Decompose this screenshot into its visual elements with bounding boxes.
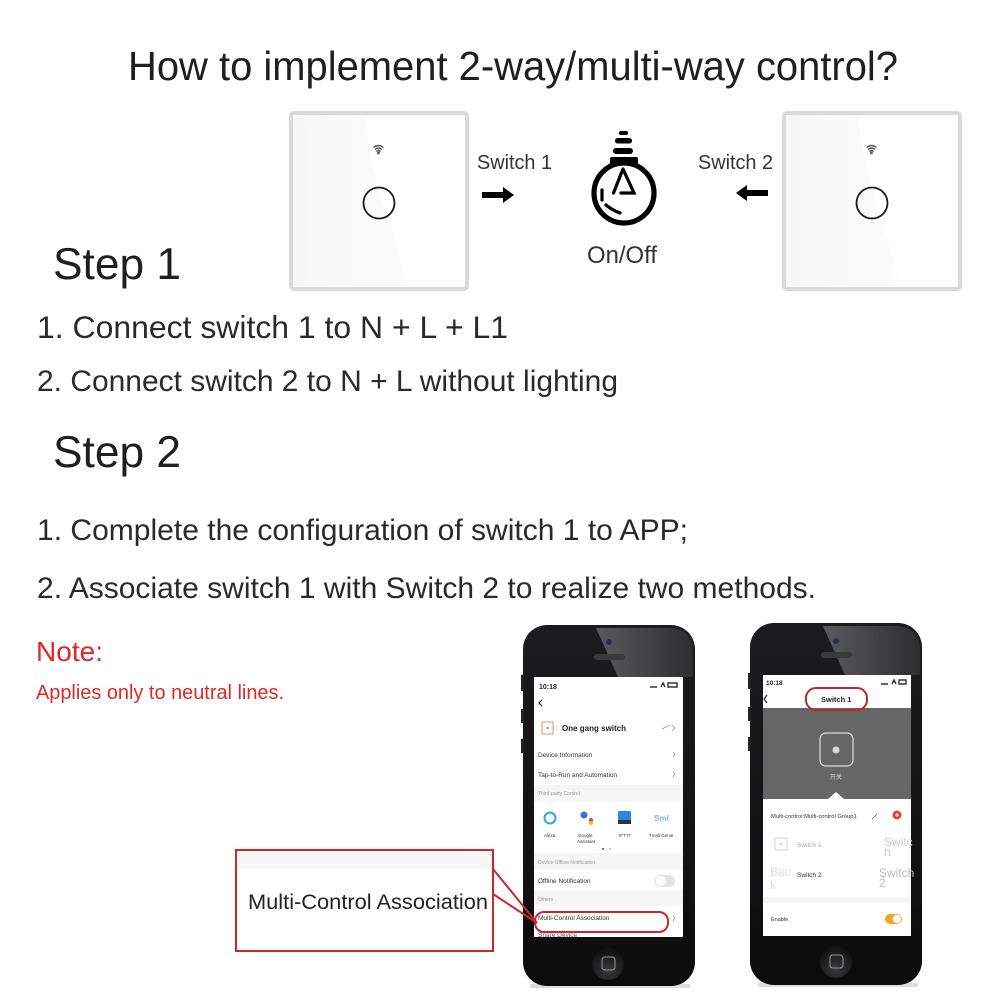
app screen: 10:18 xyxy=(539,684,557,691)
app screen: Tmall Genie xyxy=(649,833,674,838)
app screen: Others xyxy=(538,897,554,903)
arrow: right xyxy=(482,187,514,203)
touch button xyxy=(364,188,394,218)
app screen: Sml xyxy=(654,814,669,823)
label: switch 1: Switch 1 xyxy=(477,151,552,174)
app screen: Device Offline Notification xyxy=(538,860,595,866)
app screen: Switc xyxy=(884,835,913,849)
app screen: Device Information xyxy=(538,752,593,759)
switch 2 panel xyxy=(784,113,960,289)
note heading: Note: xyxy=(36,636,103,667)
app screen xyxy=(763,675,914,936)
app screen: Switch 1 xyxy=(821,695,851,704)
phone 2 xyxy=(748,623,922,987)
app screen: Share Device xyxy=(538,932,577,939)
callout: multi-control association xyxy=(236,850,668,951)
icon: wifi xyxy=(866,146,876,154)
app screen: Multi-Control Association xyxy=(538,915,610,922)
app screen: Enable xyxy=(771,917,788,923)
heading: step 2: Step 2 xyxy=(53,428,181,477)
app screen: Third-party Control xyxy=(538,791,580,797)
app screen: k xyxy=(770,878,777,892)
app screen: One gang switch xyxy=(562,724,626,733)
app screen: Multi-control:Multi-control Group1 xyxy=(771,814,857,820)
step 2 line 1: 1. Complete the configuration of switch 1 to APP; xyxy=(37,514,688,547)
label: switch 2: Switch 2 xyxy=(698,151,773,174)
highlight: switch 1 title xyxy=(806,688,867,710)
step 2 line 2: 2. Associate switch 1 with Switch 2 to realize two methods. xyxy=(37,572,816,605)
heading: step 1: Step 1 xyxy=(53,240,181,289)
app screen: 开关 xyxy=(830,773,842,781)
app screen: Bac xyxy=(770,865,791,879)
app screen: Offline Notification xyxy=(538,878,591,885)
app screen: Switch xyxy=(879,866,914,880)
app screen: Google xyxy=(578,833,593,838)
app screen: Switch 2 xyxy=(797,872,822,879)
app screen: Alexa xyxy=(544,833,556,838)
label: on/off: On/Off xyxy=(587,242,657,269)
app screen: Tap-to-Run and Automation xyxy=(538,772,618,779)
app screen: h xyxy=(884,845,891,859)
app screen: Switch 1 xyxy=(797,842,822,849)
phone 1 xyxy=(521,625,695,988)
step 1 line 1: 1. Connect switch 1 to N + L + L1 xyxy=(37,309,508,345)
app screen xyxy=(534,677,683,939)
icon: light bulb xyxy=(594,131,654,223)
icon: wifi xyxy=(374,146,384,154)
note text: Applies only to neutral lines. xyxy=(36,682,284,704)
title: How to implement 2-way/multi-way control? xyxy=(128,43,898,89)
touch button xyxy=(856,188,888,218)
app screen: IFTTT xyxy=(619,833,631,838)
switch 1 panel xyxy=(291,113,467,289)
app screen: 2 xyxy=(879,876,886,890)
callout: multi-control association: Multi-Control Association xyxy=(248,889,488,914)
arrow: left xyxy=(736,185,768,201)
step 1 line 2: 2. Connect switch 2 to N + L without lighting xyxy=(37,365,618,398)
app screen: Assistant xyxy=(577,839,596,844)
app screen: 10:18 xyxy=(766,680,783,687)
